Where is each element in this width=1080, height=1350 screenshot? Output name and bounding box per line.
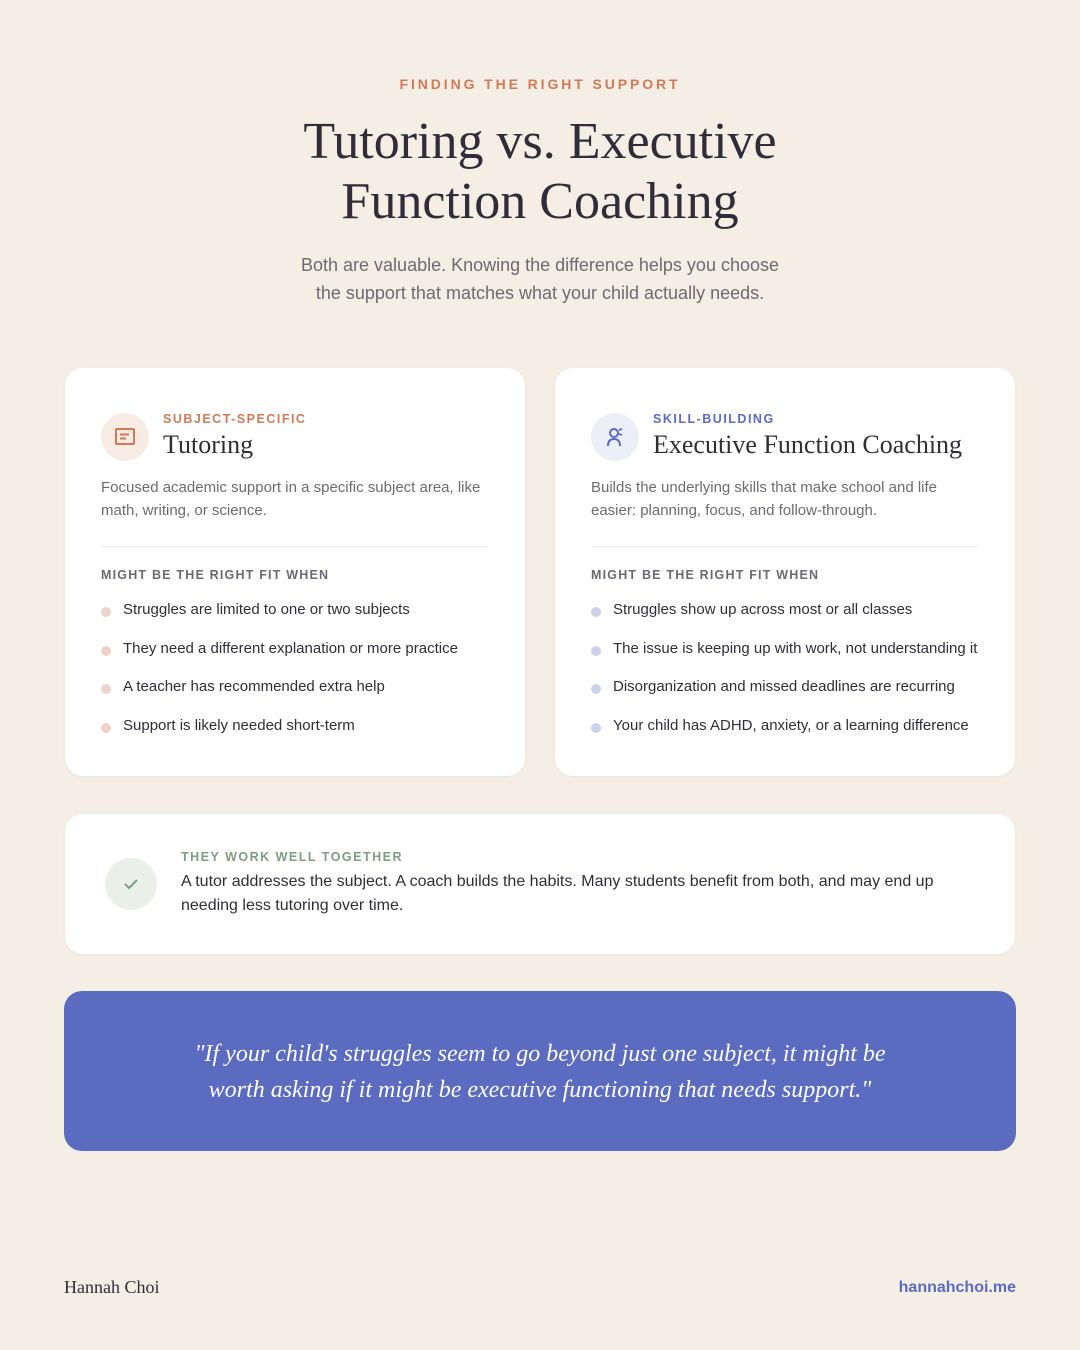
list: Your child has ADHD, anxiety, or a learning difference [613, 717, 969, 734]
panel: coaching [555, 368, 1015, 776]
heading: Executive Function Coaching [653, 430, 962, 459]
quote banner: worth asking if it might be executive functioning that needs support." [209, 1077, 871, 1103]
icon: document [101, 413, 149, 461]
list: Support is likely needed short-term [123, 717, 355, 734]
icon: check [105, 858, 157, 910]
panel: together [65, 814, 1015, 954]
list: They need a different explanation or more practice [123, 640, 458, 657]
list: Struggles are limited to one or two subjects [123, 601, 410, 618]
fit heading: MIGHT BE THE RIGHT FIT WHEN [591, 568, 819, 582]
title [303, 113, 777, 230]
footer: name: Hannah Choi [64, 1277, 159, 1297]
subtitle: Both are valuable. Knowing the difference helps you choose [301, 255, 779, 275]
eyebrow: FINDING THE RIGHT SUPPORT [400, 76, 680, 92]
text: A tutor addresses the subject. A coach builds the habits. Many students benefit from both, and may end up needing less tutoring over time. [181, 873, 933, 914]
heading: Tutoring [163, 430, 253, 459]
panel: tutoring [65, 368, 525, 776]
fit heading: MIGHT BE THE RIGHT FIT WHEN [101, 568, 329, 582]
footer: url: hannahchoi.me [899, 1279, 1016, 1296]
list: The issue is keeping up with work, not understanding it [613, 640, 977, 657]
quote banner [64, 991, 1016, 1151]
label: SKILL-BUILDING [653, 412, 775, 426]
description: Builds the underlying skills that make school and life easier: planning, focus, and follow-through. [591, 479, 937, 519]
subtitle [301, 255, 779, 303]
list: A teacher has recommended extra help [123, 678, 385, 695]
icon: person [591, 413, 639, 461]
label: THEY WORK WELL TOGETHER [181, 850, 403, 864]
title: Tutoring vs. Executive [303, 113, 777, 170]
subtitle: the support that matches what your child actually needs. [316, 283, 764, 303]
list [101, 601, 458, 734]
quote banner: "If your child's struggles seem to go beyond just one subject, it might be [194, 1041, 886, 1067]
description: Focused academic support in a specific subject area, like math, writing, or science. [101, 479, 480, 519]
list [591, 601, 978, 734]
label: SUBJECT-SPECIFIC [163, 412, 306, 426]
title: Function Coaching [341, 173, 739, 230]
list: Struggles show up across most or all classes [613, 601, 912, 618]
list: Disorganization and missed deadlines are recurring [613, 678, 955, 695]
